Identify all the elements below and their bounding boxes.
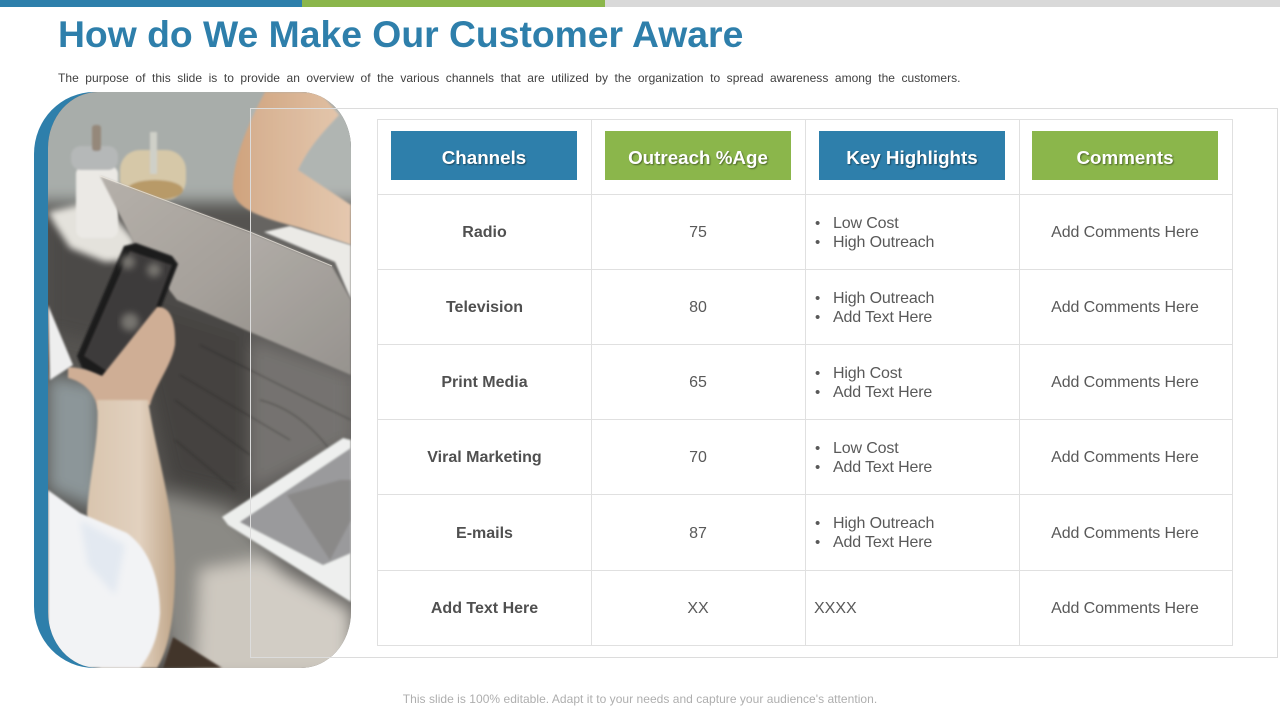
- photo: [48, 92, 351, 668]
- header: Channels: Channels: [442, 147, 526, 168]
- paper: [48, 305, 73, 380]
- phone: [77, 243, 178, 385]
- forearm: [87, 400, 175, 668]
- white cloth: [264, 226, 351, 300]
- highlights Radio: [816, 215, 934, 251]
- highlights Television: Add Text Here: [833, 309, 932, 326]
- footer note: This slide is 100% editable. Adapt it to your needs and capture your audience's attention.: [403, 692, 877, 706]
- highlights Viral Marketing: [816, 440, 932, 476]
- highlights E-mails: Add Text Here: [833, 534, 932, 551]
- row: Print Media: Print Media: [441, 374, 528, 391]
- highlights Viral Marketing: Add Text Here: [833, 459, 932, 476]
- value 80: 80: [689, 299, 707, 316]
- subtitle text: The purpose of this slide is to provide an overview of the various channels that are utilized by the organization to spread awareness among the customers.: [58, 71, 960, 85]
- highlights Print Media: [816, 365, 932, 401]
- dark table gap: [163, 637, 222, 668]
- header: Outreach %Age: [605, 131, 791, 180]
- header: Channels: [391, 131, 577, 180]
- hand: [68, 307, 175, 410]
- table: [377, 119, 1233, 646]
- value 87: 87: [689, 525, 707, 542]
- value XX: XX: [687, 600, 709, 617]
- value 75: 75: [689, 224, 707, 241]
- comment Viral Marketing: Add Comments Here: [1051, 449, 1199, 466]
- arm in background: [233, 92, 351, 245]
- highlights Television: [816, 290, 934, 326]
- value 65: 65: [689, 374, 707, 391]
- tablet: [222, 438, 351, 602]
- highlights Viral Marketing: Low Cost: [833, 440, 898, 457]
- row: Television: Television: [446, 299, 523, 316]
- blue backing shape: [34, 92, 234, 668]
- highlights E-mails: High Outreach: [833, 515, 934, 532]
- shirt: [48, 490, 160, 668]
- title: How do We Make Our Customer Aware: [58, 13, 743, 55]
- header: Comments: Comments: [1076, 147, 1174, 168]
- highlights Television: High Outreach: [833, 290, 934, 307]
- table wood: [48, 92, 351, 668]
- header: Key Highlights: [819, 131, 1005, 180]
- sugar jar: [71, 125, 118, 238]
- row: E-mails: E-mails: [456, 525, 513, 542]
- comment E-mails: Add Comments Here: [1051, 525, 1199, 542]
- highlights Radio: High Outreach: [833, 234, 934, 251]
- header: Comments: [1032, 131, 1218, 180]
- row: Radio: Radio: [462, 224, 507, 241]
- comment last row: Add Comments Here: [1051, 600, 1199, 617]
- highlights XXXX: XXXX: [814, 600, 857, 617]
- saucer: [48, 200, 135, 262]
- glass panel outline: [250, 108, 1278, 658]
- value 70: 70: [689, 449, 707, 466]
- comment Television: Add Comments Here: [1051, 299, 1199, 316]
- highlights Print Media: Add Text Here: [833, 384, 932, 401]
- highlights E-mails: [816, 515, 934, 551]
- laptop: [100, 176, 351, 375]
- cup: [120, 132, 186, 200]
- comment Print Media: Add Comments Here: [1051, 374, 1199, 391]
- row: Add Text Here: Add Text Here: [431, 600, 538, 617]
- highlights Radio: Low Cost: [833, 215, 898, 232]
- highlights Print Media: High Cost: [833, 365, 902, 382]
- glass tint: [250, 108, 351, 657]
- comment Radio: Add Comments Here: [1051, 224, 1199, 241]
- header: Outreach %Age: Outreach %Age: [628, 147, 768, 168]
- row: Viral Marketing: Viral Marketing: [427, 449, 542, 466]
- phone screen reflections: [121, 255, 161, 331]
- top colour bar: [0, 0, 1280, 7]
- photo panel with blue backing: [34, 92, 351, 668]
- header: Key Highlights: Key Highlights: [846, 147, 978, 168]
